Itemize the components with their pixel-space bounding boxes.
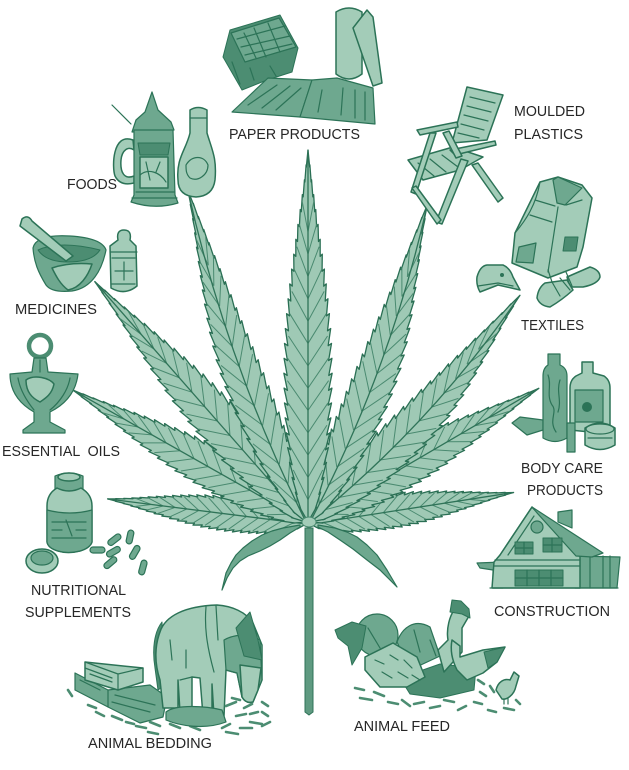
ground mass (400, 664, 476, 698)
round window (531, 521, 543, 533)
label: animal feed: ANIMAL FEED (354, 719, 450, 735)
small leaflet: left (222, 525, 300, 590)
stem (305, 528, 313, 715)
label: paper products: PAPER PRODUCTS (229, 127, 360, 143)
standing rooster (438, 608, 469, 672)
leaflet: top (284, 150, 332, 522)
upper windows (515, 538, 562, 554)
front hen (365, 643, 425, 687)
paper roll and sheet (336, 8, 362, 79)
left extension (477, 562, 503, 588)
label: essential oils: ESSENTIAL OILS (2, 444, 120, 460)
small leaflet: right (318, 525, 397, 587)
back rooster (356, 614, 398, 656)
label: body care products (521, 461, 603, 499)
straw bales (75, 673, 167, 723)
chick (496, 672, 519, 699)
icon: horse with straw bales (68, 605, 270, 734)
label: nutritional supplements (25, 583, 131, 621)
right hen (451, 640, 505, 680)
chimney (558, 510, 572, 528)
back hen (397, 624, 440, 670)
label: foods: FOODS (67, 177, 117, 193)
leaflet: far left (105, 482, 308, 541)
stem collar (302, 517, 316, 527)
leaflet: upper left (159, 187, 317, 532)
leaflet: middle left (78, 266, 323, 537)
newspaper stack (223, 15, 298, 90)
label: moulded plastics: MOULDED (514, 104, 585, 120)
icon: body care products (512, 354, 615, 452)
horse head and mane (224, 635, 262, 702)
label: nutritional supplements: SUPPLEMENTS (25, 605, 131, 621)
roof side (532, 507, 603, 557)
icon: paper products (223, 8, 382, 124)
icon: perfume bottle (10, 335, 78, 433)
horse body (156, 605, 262, 716)
sandals (567, 267, 600, 287)
front gable (492, 507, 580, 588)
wide bottle (570, 362, 610, 432)
hemp leaf (62, 150, 550, 715)
feed scatter (355, 680, 520, 712)
open book (232, 78, 312, 117)
rooster tail (335, 622, 366, 665)
sponge (512, 417, 543, 435)
horse tail (154, 622, 164, 690)
label: construction: CONSTRUCTION (494, 604, 610, 620)
label: body care products: BODY CARE (521, 461, 603, 477)
straw (68, 690, 270, 734)
leaflet: lower left (62, 372, 316, 541)
label: body care products: PRODUCTS (527, 483, 603, 499)
side wing (575, 556, 620, 588)
icon: supplements bottle, lid and capsules (26, 473, 148, 576)
icon: textiles (jacket, cap and sandals) (477, 177, 600, 307)
leaflet: middle right (301, 287, 544, 544)
icon: chickens (335, 600, 520, 712)
label: nutritional supplements: NUTRITIONAL (31, 583, 126, 599)
icon: beer stein and sauce bottle (112, 92, 215, 206)
jar (585, 423, 615, 450)
icon: house (construction) (477, 507, 620, 588)
icon: moulded plastic chair (408, 87, 503, 224)
label: textiles: TEXTILES (521, 318, 584, 334)
leaflet: upper right (299, 201, 458, 533)
label: medicines: MEDICINES (15, 302, 97, 318)
tube (567, 423, 575, 452)
label: moulded plastics (514, 104, 585, 143)
roof edge (494, 507, 580, 566)
leaflet: far right (307, 475, 516, 541)
label: animal bedding: ANIMAL BEDDING (88, 736, 212, 752)
leaflet: lower right (299, 370, 550, 540)
jacket (512, 177, 592, 278)
cap (477, 265, 520, 292)
lower window (515, 570, 563, 586)
tall bottle (543, 354, 567, 442)
capsules (90, 530, 148, 576)
icon: mortar, pestle and medicine bottle (20, 217, 137, 292)
label: moulded plastics: PLASTICS (514, 127, 583, 143)
comb (450, 600, 470, 618)
